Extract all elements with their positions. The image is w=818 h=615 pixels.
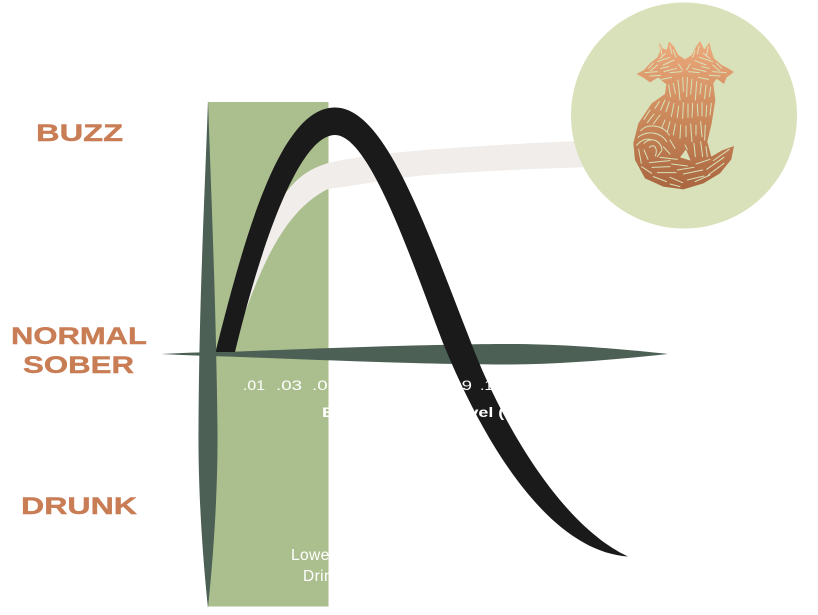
lower risk drinking note bbox=[291, 547, 372, 585]
blood alcohol level scale: .08 bbox=[415, 378, 441, 393]
blood alcohol level scale: .06 bbox=[347, 378, 373, 393]
axis title: Blood Alcohol Level (BAC) bbox=[322, 404, 549, 420]
blood alcohol level scale bbox=[243, 378, 502, 393]
label: buzz: BUZZ bbox=[36, 120, 123, 147]
lower risk drinking note: Lower Risk bbox=[291, 547, 372, 564]
gap between paws and tail bbox=[680, 149, 691, 161]
fox body and tail bbox=[633, 75, 734, 189]
label: normal sober bbox=[11, 323, 147, 379]
lower risk drinking note: Drinking bbox=[303, 568, 363, 585]
fox right head bbox=[685, 41, 734, 84]
circle with fox emblem bbox=[571, 2, 797, 228]
fox left head bbox=[637, 41, 685, 85]
blood alcohol level scale: .05 bbox=[312, 378, 338, 393]
fox fur hatching bbox=[637, 46, 729, 187]
blood alcohol level scale: .03 bbox=[276, 378, 302, 393]
icon: two-headed fox bbox=[633, 41, 734, 189]
black intoxication curve bbox=[216, 108, 628, 556]
vertical axis lens bbox=[198, 100, 218, 608]
blood alcohol level scale: .07 bbox=[381, 378, 407, 393]
blood alcohol level scale: .10 bbox=[480, 378, 502, 393]
green circle bbox=[571, 2, 797, 228]
blood alcohol level scale: .01 bbox=[243, 378, 265, 393]
blood alcohol level scale: .09 bbox=[446, 378, 472, 393]
label: normal sober: SOBER bbox=[23, 352, 134, 379]
label: drunk: DRUNK bbox=[21, 493, 138, 520]
pale buzz band bbox=[232, 141, 590, 340]
horizontal axis lens bbox=[161, 344, 668, 364]
lower risk green zone bbox=[208, 102, 328, 606]
label: normal sober: NORMAL bbox=[11, 323, 147, 350]
